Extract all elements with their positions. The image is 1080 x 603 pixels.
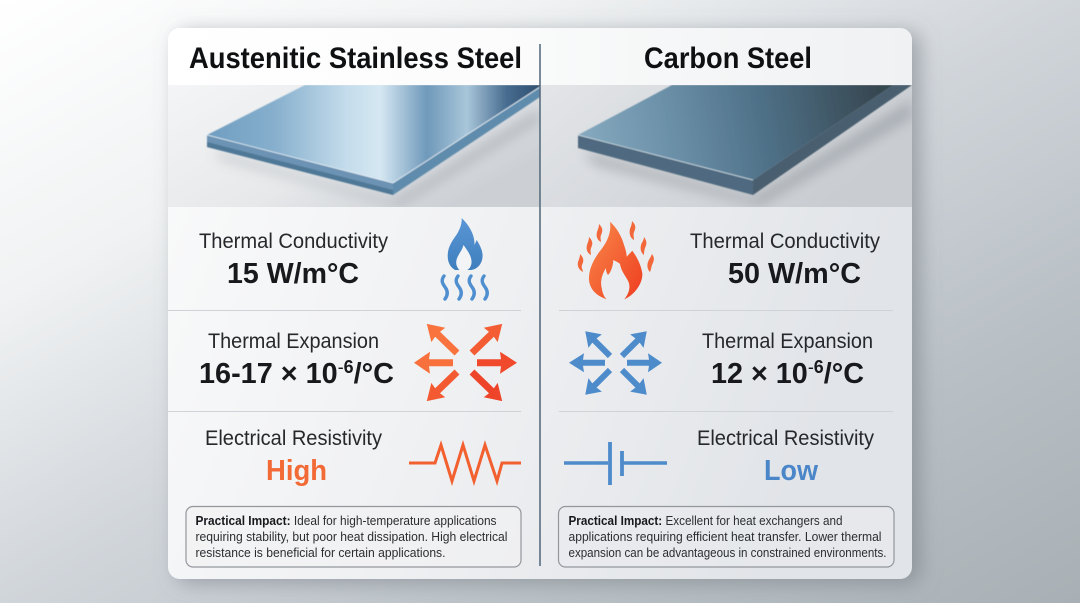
heading: carbon steel: Carbon Steel <box>644 42 812 75</box>
left: electrical resistivity: High <box>266 455 327 487</box>
row dividers <box>168 310 893 412</box>
callout: practical impact stainless <box>186 506 521 567</box>
right: thermal expansion: 12 × 10 <box>711 358 809 390</box>
right: electrical resistivity <box>697 427 874 487</box>
callout: practical impact carbon: Practical Impact: Excellent for heat exchangers and <box>568 513 842 528</box>
right: thermal expansion: Thermal Expansion <box>702 330 873 353</box>
icon: orange expansion arrows <box>414 317 517 408</box>
heading: austenitic stainless steel: Austenitic Stainless Steel <box>189 42 522 75</box>
icon: blue contraction arrows <box>569 325 662 401</box>
icon: blue flame with heat waves <box>442 218 487 299</box>
left: thermal conductivity <box>199 230 388 290</box>
left: thermal expansion: Thermal Expansion <box>208 330 379 353</box>
image: carbon steel plate <box>541 85 912 207</box>
column divider <box>539 44 541 566</box>
left: thermal conductivity: Thermal Conductivity <box>199 230 388 253</box>
left: thermal expansion: - <box>338 357 344 377</box>
left: thermal expansion: 6 <box>344 357 354 377</box>
callout: practical impact carbon: applications requiring efficient heat transfer. Lower thermal <box>568 529 882 544</box>
right: thermal expansion: /°C <box>824 358 864 390</box>
right: thermal conductivity: 50 W/m°C <box>728 258 861 290</box>
left: thermal expansion: 16-17 × 10 <box>199 358 338 390</box>
right: thermal expansion: - <box>808 357 814 377</box>
icon: battery symbol <box>564 442 667 485</box>
callout: practical impact stainless: resistance is beneficial for certain applications. <box>196 545 446 560</box>
right: thermal expansion: 6 <box>814 357 824 377</box>
comparison card <box>168 28 912 579</box>
image: stainless steel plate <box>168 85 540 207</box>
callout: practical impact stainless: Practical Impact: Ideal for high-temperature applications <box>196 513 497 528</box>
callout: practical impact carbon <box>558 506 894 567</box>
right: flame icon <box>578 221 654 299</box>
right: electrical resistivity: Low <box>764 455 818 487</box>
right: thermal conductivity <box>690 230 880 290</box>
right: thermal expansion <box>702 330 873 390</box>
left: thermal expansion: /°C <box>354 358 394 390</box>
callout: practical impact stainless: requiring stability, but poor heat dissipation. High electrical <box>196 529 508 544</box>
right: electrical resistivity: Electrical Resistivity <box>697 427 874 450</box>
left: electrical resistivity: Electrical Resistivity <box>205 427 382 450</box>
left: electrical resistivity <box>205 427 382 487</box>
right: thermal conductivity: Thermal Conductivity <box>690 230 880 253</box>
left: thermal conductivity: 15 W/m°C <box>227 258 359 290</box>
icon: resistor symbol <box>409 445 521 481</box>
callout: practical impact carbon: expansion can be advantageous in constrained environments. <box>568 545 886 560</box>
left: thermal expansion <box>199 330 394 390</box>
